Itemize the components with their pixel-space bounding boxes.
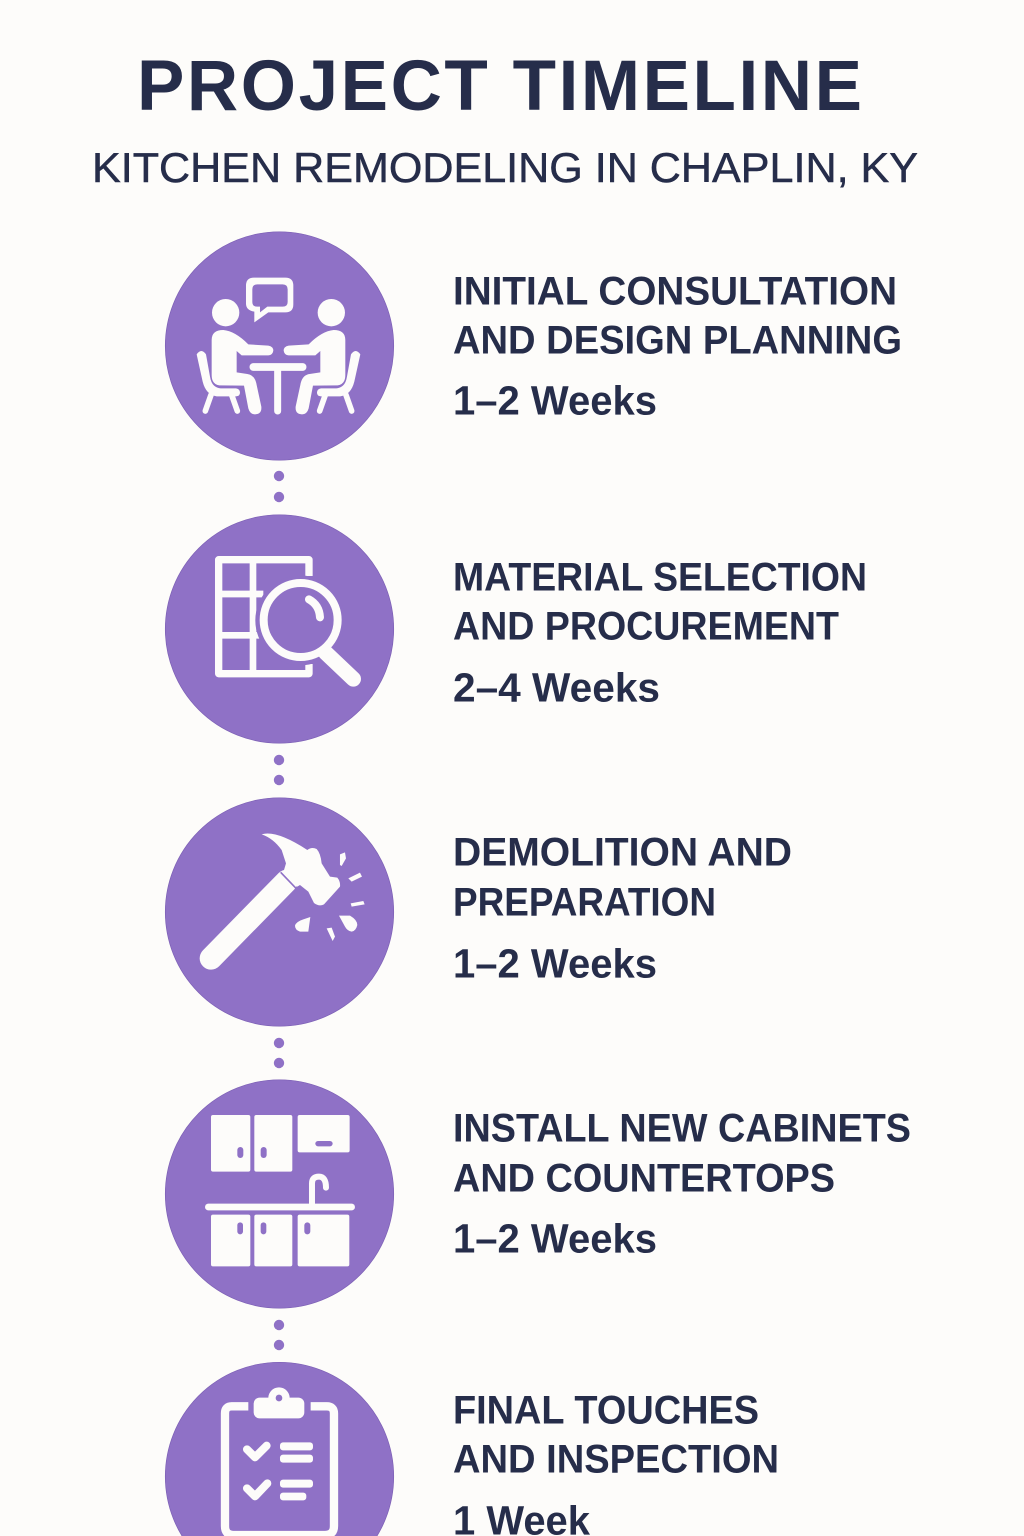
title: PROJECT TIMELINE — [137, 47, 862, 126]
step 2 text: MATERIAL SELECTION — [453, 556, 867, 600]
connector dots between steps — [274, 471, 284, 1350]
step 1 text: INITIAL CONSULTATION — [453, 270, 897, 314]
step 3 circle icon: hammer — [165, 798, 394, 1026]
step 2 text: 2–4 Weeks — [453, 664, 660, 710]
step 4 text — [453, 1106, 911, 1262]
step 5 text: FINAL TOUCHES — [453, 1388, 759, 1432]
step 3 text: DEMOLITION AND — [453, 830, 792, 874]
step 5 text — [453, 1388, 779, 1536]
step 2 circle icon: material search — [165, 515, 394, 743]
step 1 text — [453, 270, 902, 424]
step 3 text: PREPARATION — [453, 880, 716, 924]
step 4 circle icon: cabinets and countertop — [165, 1080, 394, 1308]
step 1 text: 1–2 Weeks — [453, 378, 657, 424]
subtitle: KITCHEN REMODELING IN CHAPLIN, KY — [92, 144, 918, 191]
step 4 text: 1–2 Weeks — [453, 1216, 657, 1262]
step 5 circle icon: inspection clipboard — [165, 1362, 394, 1536]
step 4 text: INSTALL NEW CABINETS — [453, 1106, 911, 1150]
step 2 text: AND PROCUREMENT — [453, 604, 839, 648]
step 4 text: AND COUNTERTOPS — [453, 1156, 835, 1200]
step 2 text — [453, 556, 867, 710]
step 5 text: AND INSPECTION — [453, 1438, 779, 1482]
step 3 text — [453, 830, 792, 986]
step 1 circle icon: consultation — [165, 232, 394, 460]
step 1 text: AND DESIGN PLANNING — [453, 318, 902, 362]
step 3 text: 1–2 Weeks — [453, 940, 657, 986]
